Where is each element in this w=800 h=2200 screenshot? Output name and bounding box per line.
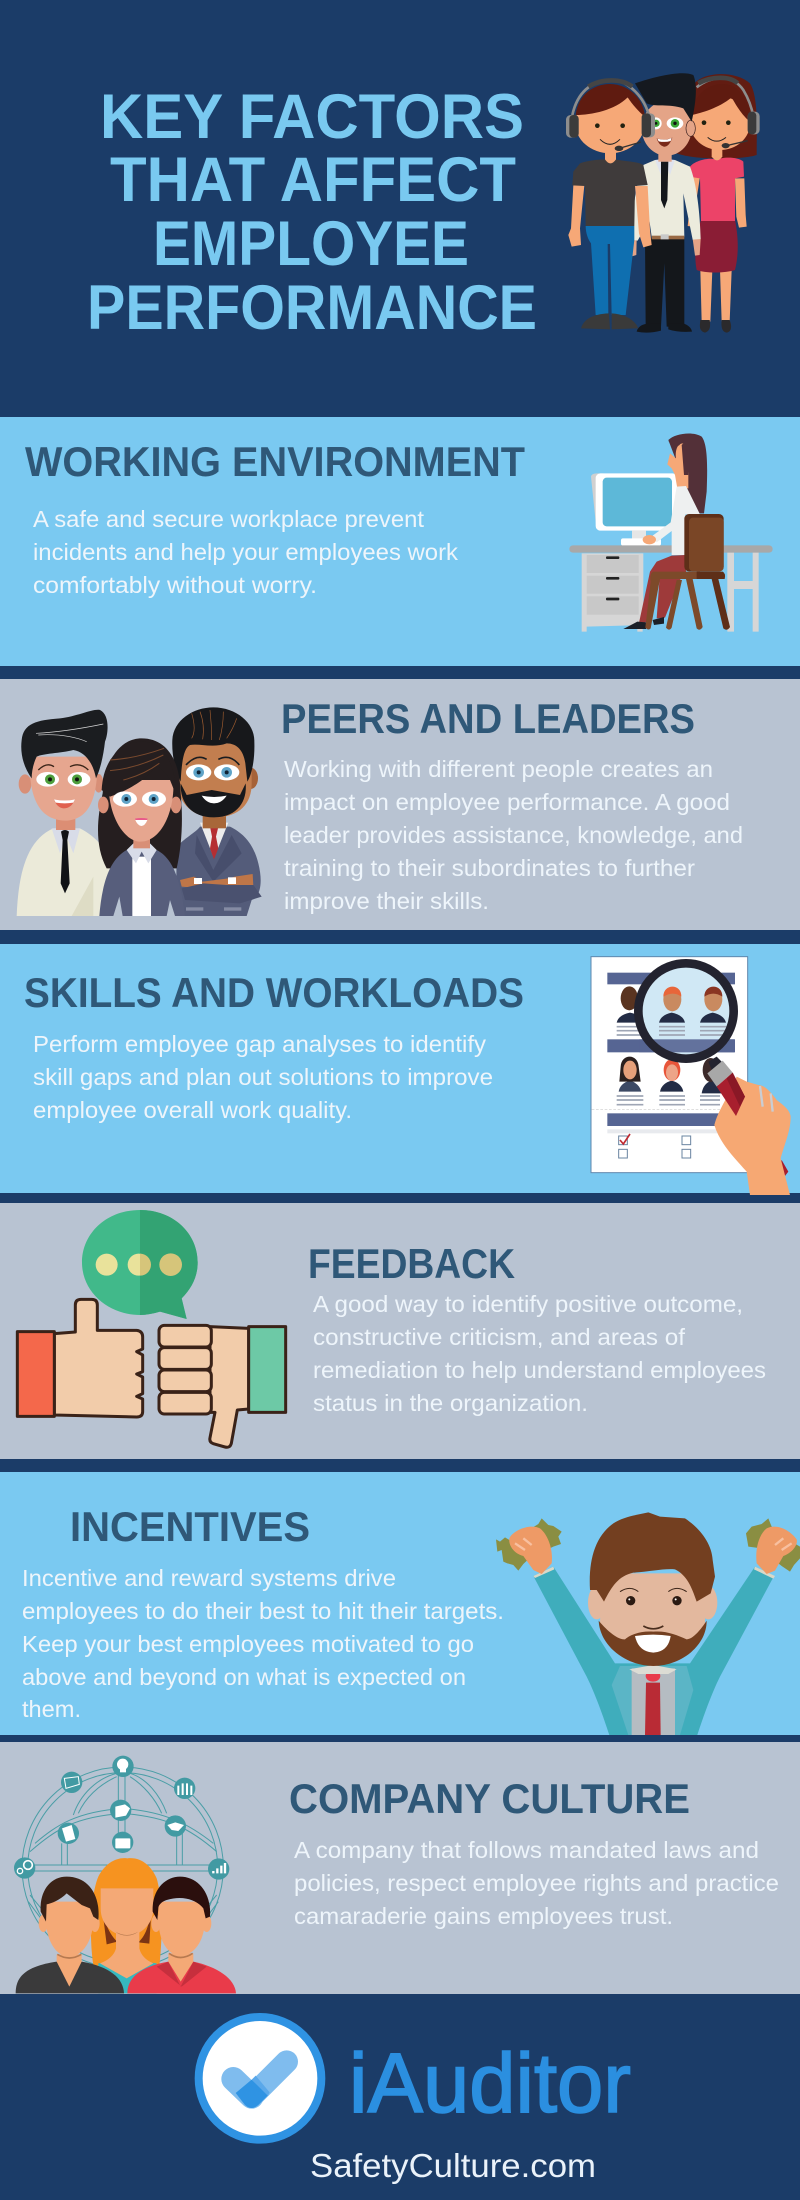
icon: thumbs up [17,1299,143,1417]
heading: working environment: WORKING ENVIRONMENT [25,438,525,485]
illustration: woman at desk [569,433,773,632]
text block: feedback: A good way to identify positive outcome, [313,1291,743,1317]
text block: company culture: A company that follows mandated laws and [294,1837,759,1863]
panel: working environment [0,417,800,666]
text block: peers and leaders [284,756,743,914]
text block: peers and leaders: improve their skills. [284,888,489,914]
text block: incentives [22,1565,504,1722]
text block: feedback: remediation to help understand employees [313,1357,766,1383]
illustration: speech bubble and thumbs [17,1210,286,1447]
illustration: three employees with headsets [566,73,760,333]
illustration: globe network and three people [14,1756,236,1993]
illustration: three colleagues [17,707,262,916]
text block: feedback: constructive criticism, and areas of [313,1324,686,1350]
logo: iAuditor check badge [199,2017,321,2140]
text block: peers and leaders: Working with different people creates an [284,756,713,782]
text block: company culture [294,1837,779,1929]
title: PERFORMANCE [87,273,537,343]
text block: company culture: policies, respect employee rights and practice [294,1870,779,1896]
icon: speech bubble [82,1210,198,1319]
text block: peers and leaders: impact on employee performance. A good [284,789,730,815]
panel: feedback [0,1203,800,1459]
title: KEY FACTORS [100,82,524,152]
text block: incentives: Keep your best employees motivated to go [22,1631,474,1657]
brand name: iAuditor [349,2036,631,2130]
heading: peers and leaders: PEERS AND LEADERS [281,695,695,742]
title: EMPLOYEE [153,209,469,279]
panel: peers and leaders [0,679,800,930]
heading: incentives: INCENTIVES [70,1503,310,1550]
text block: feedback: status in the organization. [313,1390,588,1416]
illustration: resume under magnifying glass [591,957,791,1195]
text block: feedback [313,1291,766,1416]
icon: money left [496,1518,562,1574]
heading: company culture: COMPANY CULTURE [289,1775,690,1822]
text block: peers and leaders: leader provides assistance, knowledge, and [284,822,743,848]
person: man in red shirt [127,1877,236,1993]
panel: skills and workloads [0,944,800,1195]
person: woman with orange hair [91,1858,162,1993]
person: man in dark shirt [16,1877,124,1993]
website address: SafetyCulture.com [310,2147,596,2184]
illustration: happy man holding money [496,1512,800,1735]
title [87,82,537,343]
text block: working environment: comfortably without worry. [33,572,317,598]
text block: skills and workloads: Perform employee gap analyses to identify [33,1031,487,1057]
text block: working environment: incidents and help your employees work [33,539,459,565]
icon: network nodes [14,1756,229,1880]
text block: working environment [33,506,459,598]
icon: network globe [22,1767,223,1968]
text block: incentives: Incentive and reward systems drive [22,1565,396,1591]
icon: money right [746,1518,800,1574]
panel: incentives [0,1472,800,1735]
text block: skills and workloads: skill gaps and plan out solutions to improve [33,1064,493,1090]
text block: skills and workloads [33,1031,493,1123]
title: THAT AFFECT [110,145,516,215]
text block: working environment: A safe and secure workplace prevent [33,506,425,532]
text block: peers and leaders: training to their subordinates to further [284,855,695,881]
heading: skills and workloads: SKILLS AND WORKLOADS [24,969,524,1016]
icon: thumbs down [159,1325,286,1447]
panel: company culture [0,1742,800,2184]
text block: skills and workloads: employee overall work quality. [33,1097,352,1123]
text block: company culture: camaraderie gains employees trust. [294,1903,673,1929]
text block: incentives: them. [22,1696,81,1722]
text block: incentives: above and beyond on what is expected on [22,1664,466,1690]
text block: incentives: employees to do their best to hit their targets. [22,1598,504,1624]
heading: feedback: FEEDBACK [308,1240,515,1287]
